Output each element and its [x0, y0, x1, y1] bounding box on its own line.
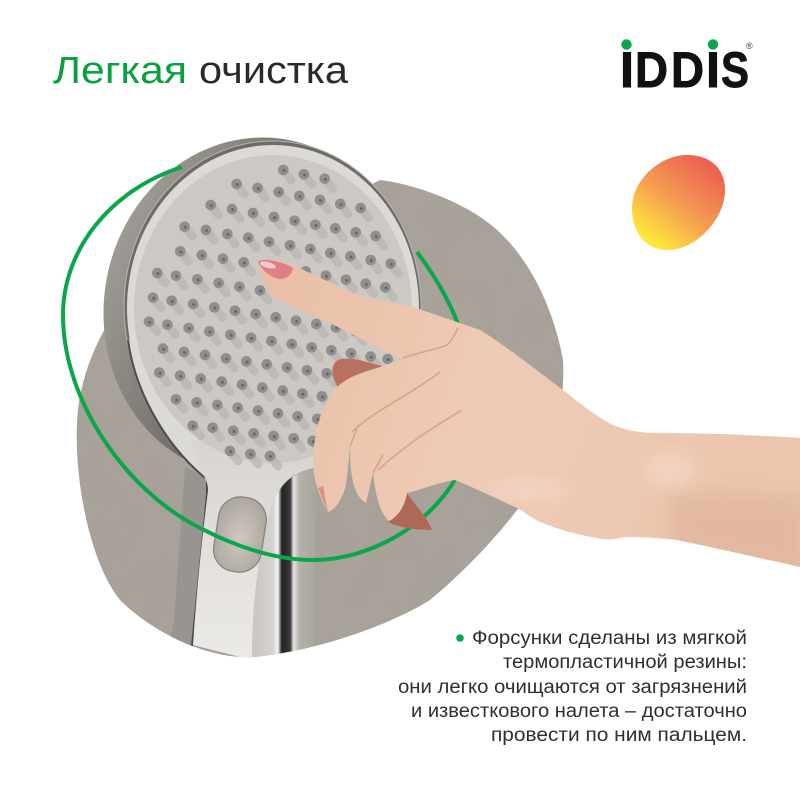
- description text: провести по ним пальцем.: [491, 725, 747, 746]
- head rim: [127, 145, 419, 471]
- nozzles upper: [144, 165, 399, 429]
- logo wordmark: D: [671, 42, 704, 98]
- shower handle chrome: [170, 466, 316, 660]
- green outline curve: [63, 167, 458, 560]
- hand shape: [260, 259, 800, 567]
- handle right chrome: [250, 466, 316, 660]
- description text: термопластичной резины:: [503, 652, 747, 673]
- forearm shading: [504, 454, 800, 567]
- gradient egg decoration: [632, 155, 725, 250]
- bullet: [456, 634, 464, 642]
- logo wordmark: S: [721, 42, 749, 98]
- head face: [134, 155, 412, 463]
- title green word: Легкая: [53, 50, 187, 92]
- little finger tip: [388, 493, 432, 530]
- nozzles lower: [187, 420, 321, 466]
- logo dots: [621, 39, 632, 50]
- logo IDDIS: [620, 39, 753, 98]
- rim lower left edge: [128, 340, 205, 478]
- curled finger tip: [332, 359, 390, 395]
- description text: они легко очищаются от загрязнений: [398, 677, 747, 698]
- title: [53, 50, 349, 92]
- head chrome ring: [124, 141, 421, 473]
- title dark word: очистка: [199, 50, 349, 92]
- logo wordmark: [620, 42, 749, 98]
- description text: и известкового налета – достаточно: [411, 701, 747, 722]
- description text: [398, 628, 747, 746]
- finger creases: [350, 328, 462, 473]
- registered mark: ®: [746, 41, 753, 51]
- slider button: [210, 494, 269, 575]
- stone blob background: [70, 170, 570, 665]
- nail: [258, 260, 293, 279]
- logo wordmark: I: [706, 42, 720, 98]
- hand: [258, 259, 800, 580]
- middle finger nail: [318, 486, 328, 512]
- shower head: [103, 138, 422, 658]
- handle left chrome: [170, 467, 207, 650]
- handle body and neck: [193, 464, 314, 658]
- description text: Форсунки сделаны из мягкой: [472, 628, 747, 649]
- logo wordmark: I: [620, 42, 634, 98]
- head back rim: [77, 113, 437, 501]
- logo wordmark: D: [635, 42, 668, 98]
- head rim lower left flare: [128, 330, 290, 478]
- nail highlight: [259, 260, 277, 270]
